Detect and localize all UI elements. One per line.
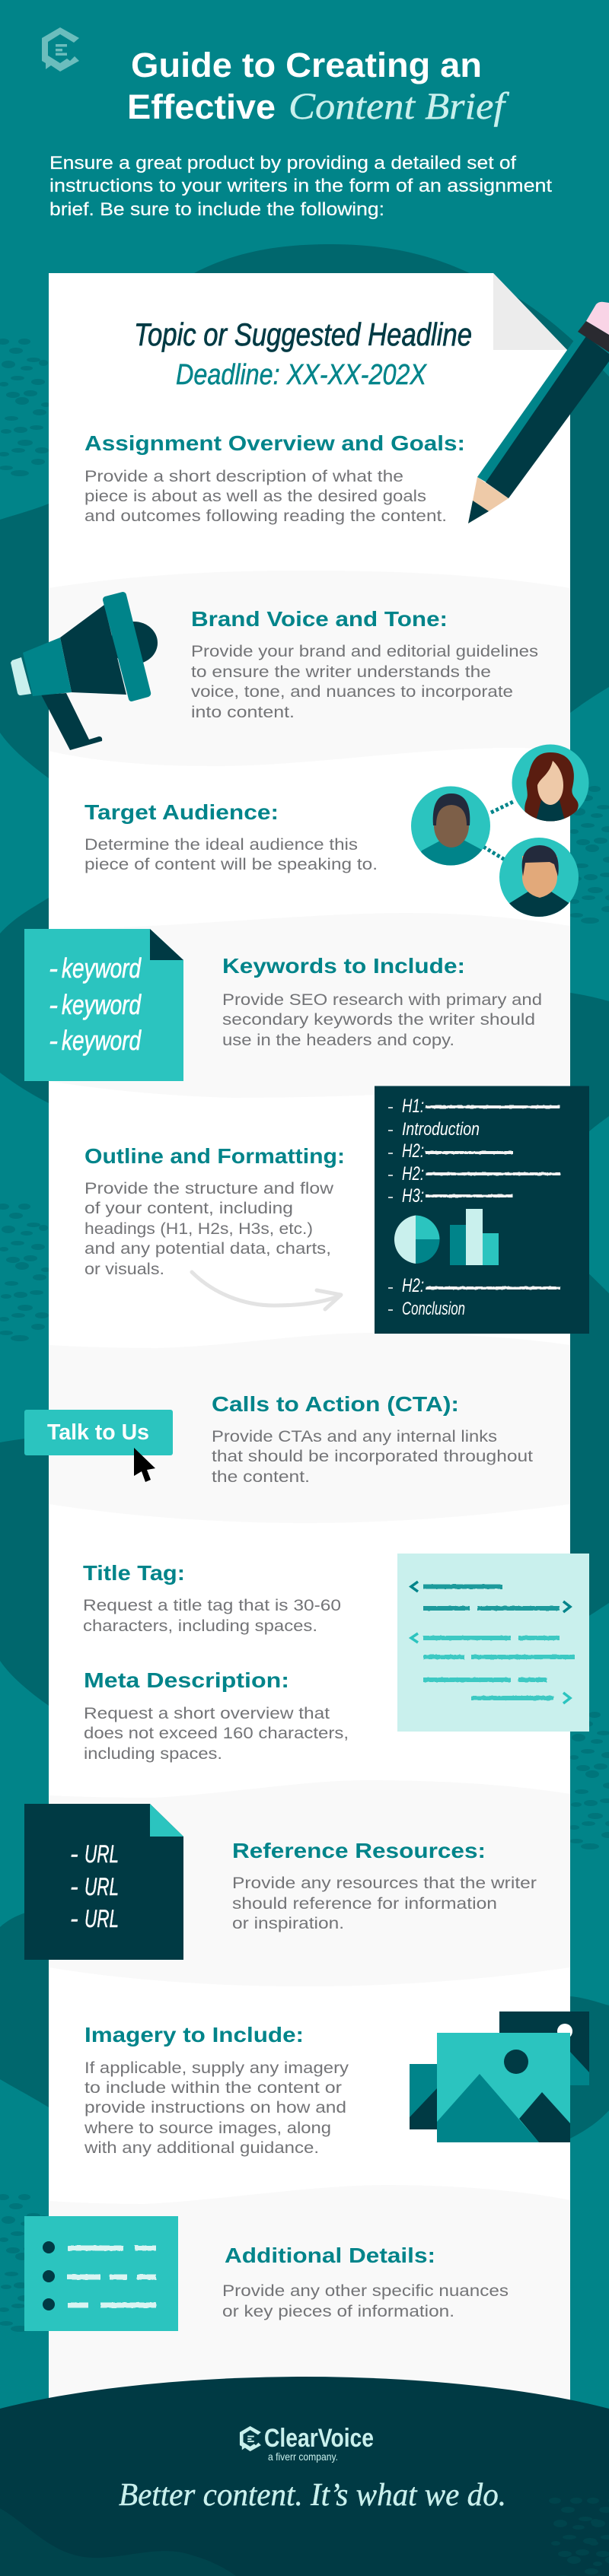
panel: title and meta snippet xyxy=(397,1554,589,1732)
icon: CTA button: Talk to Us xyxy=(47,1420,149,1445)
icon: URL note: URL xyxy=(84,1905,119,1932)
section: calls to action: that should be incorporated throughout xyxy=(212,1448,533,1465)
section: calls to action xyxy=(212,1392,533,1486)
icon: URL note xyxy=(24,1804,183,1960)
section: brand voice: into content. xyxy=(191,704,295,721)
footer logo: ClearVoice xyxy=(264,2424,374,2453)
section: target audience: piece of content will be speaking to. xyxy=(84,856,378,873)
section: calls to action: Calls to Action (CTA): xyxy=(212,1392,459,1416)
intro text xyxy=(49,153,552,220)
section: assignment overview: Provide a short description of what the xyxy=(84,468,403,485)
section: reference resources: Reference Resources: xyxy=(232,1839,486,1862)
section: brand voice: Provide your brand and editorial guidelines xyxy=(191,643,538,660)
topic heading: Topic or Suggested Headline xyxy=(134,316,472,352)
icon: image stack xyxy=(410,2012,589,2142)
section: additional details: Provide any other specific nuances xyxy=(222,2282,509,2300)
panel: outline document: Introduction xyxy=(402,1119,480,1140)
icon: keyword note: keyword xyxy=(62,1025,142,1056)
section: title tag: characters, including spaces. xyxy=(83,1617,317,1635)
section: keywords: use in the headers and copy. xyxy=(222,1032,454,1049)
section: meta description: Request a short overview that xyxy=(84,1705,330,1722)
icon: CTA button xyxy=(24,1410,173,1482)
intro text: Ensure a great product by providing a detailed set of xyxy=(49,153,516,173)
panel: white brief document xyxy=(49,273,570,2434)
section: meta description: including spaces. xyxy=(84,1745,222,1763)
icon: keyword note: keyword xyxy=(62,952,142,984)
icon: keyword note: - xyxy=(49,952,58,984)
section: meta description: does not exceed 160 characters, xyxy=(84,1725,349,1742)
section: brand voice xyxy=(191,607,538,721)
icon: bullet list xyxy=(24,2216,178,2331)
intro text: brief. Be sure to include the following: xyxy=(49,199,384,220)
icon: pencil xyxy=(468,302,609,523)
bar chart xyxy=(450,1209,499,1265)
icon: URL note: - xyxy=(70,1905,78,1932)
deadline: Deadline: XX-XX-202X xyxy=(176,359,427,391)
icon: URL note: - xyxy=(70,1840,78,1868)
section: imagery: Imagery to Include: xyxy=(84,2023,304,2046)
section: imagery: If applicable, supply any imagery xyxy=(84,2059,349,2077)
section: brand voice: to ensure the writer understands the xyxy=(191,663,491,681)
section: additional details xyxy=(222,2244,509,2320)
title xyxy=(127,46,509,127)
section: calls to action: the content. xyxy=(212,1468,310,1486)
panel: outline document: H2: xyxy=(402,1163,424,1185)
footer logo: a fiverr company. xyxy=(268,2450,338,2463)
icon: keyword note: - xyxy=(49,1025,58,1056)
intro text: instructions to your writers in the form of an assignment xyxy=(49,176,552,196)
section: outline and formatting: and any potential data, charts, xyxy=(84,1240,331,1258)
panel: outline document: H3: xyxy=(402,1185,424,1207)
section: target audience: Target Audience: xyxy=(84,800,279,824)
tagline: Better content. It’s what we do. xyxy=(119,2478,506,2513)
title: Guide to Creating an xyxy=(131,46,482,84)
section: keywords xyxy=(222,954,542,1049)
icon: keyword note: - xyxy=(49,989,58,1020)
section: brand voice: Brand Voice and Tone: xyxy=(191,607,448,631)
section: keywords: Keywords to Include: xyxy=(222,954,465,978)
section: outline and formatting: or visuals. xyxy=(84,1261,164,1278)
icon: megaphone xyxy=(11,592,158,750)
section: assignment overview: piece is about as well as the desired goals xyxy=(84,488,426,505)
section: calls to action: Provide CTAs and any internal links xyxy=(212,1428,497,1445)
section: title tag: Request a title tag that is 30-60 xyxy=(83,1597,341,1614)
section: outline and formatting xyxy=(84,1144,345,1278)
section: keywords: secondary keywords the writer should xyxy=(222,1011,535,1029)
section: reference resources: Provide any resources that the writer xyxy=(232,1875,537,1892)
footer xyxy=(0,2377,609,2576)
icon: keyword note xyxy=(24,929,183,1081)
icon: audience avatars xyxy=(411,744,589,921)
section: assignment overview xyxy=(84,431,465,525)
section: imagery xyxy=(84,2023,349,2157)
section: target audience: Determine the ideal audience this xyxy=(84,836,358,854)
title: Content Brief xyxy=(289,84,509,127)
section: title tag: Title Tag: xyxy=(83,1561,185,1585)
section: imagery: provide instructions on how and xyxy=(84,2099,346,2116)
icon: URL note: URL xyxy=(84,1873,119,1900)
section: reference resources xyxy=(232,1839,537,1932)
section: meta description: Meta Description: xyxy=(84,1668,289,1692)
section: reference resources: should reference for information xyxy=(232,1895,497,1913)
section: additional details: or key pieces of information. xyxy=(222,2303,454,2320)
section: outline and formatting: headings (H1, H2s, H3s, etc.) xyxy=(84,1220,313,1238)
pie chart xyxy=(394,1216,440,1264)
logo: ClearVoice mark xyxy=(42,27,79,72)
panel: outline document: Conclusion xyxy=(402,1299,465,1319)
section: meta description xyxy=(84,1668,349,1763)
section: imagery: where to source images, along xyxy=(84,2120,331,2137)
arrow xyxy=(192,1272,341,1309)
panel: outline document: H2: xyxy=(402,1140,424,1162)
section: assignment overview: and outcomes following reading the content. xyxy=(84,507,447,525)
section: imagery: with any additional guidance. xyxy=(84,2139,319,2157)
icon: URL note: URL xyxy=(84,1840,119,1868)
icon: URL note: - xyxy=(70,1873,78,1900)
section: keywords: Provide SEO research with primary and xyxy=(222,991,542,1009)
section: assignment overview: Assignment Overview and Goals: xyxy=(84,431,465,455)
section: title tag xyxy=(83,1561,341,1635)
section: outline and formatting: Outline and Formatting: xyxy=(84,1144,345,1168)
panel: outline document: H2: xyxy=(402,1275,424,1296)
section: outline and formatting: of your content, including xyxy=(84,1200,293,1217)
page fold xyxy=(493,273,567,350)
title: Effective xyxy=(127,87,276,126)
section: brand voice: voice, tone, and nuances to incorporate xyxy=(191,683,513,701)
panel: outline document xyxy=(375,1086,589,1334)
section: outline and formatting: Provide the structure and flow xyxy=(84,1180,334,1197)
footer logo xyxy=(240,2424,374,2463)
panel: outline document: H1: xyxy=(402,1096,424,1117)
section: target audience xyxy=(84,800,378,873)
section: reference resources: or inspiration. xyxy=(232,1915,344,1932)
section: imagery: to include within the content or xyxy=(84,2079,342,2097)
icon: keyword note: keyword xyxy=(62,989,142,1020)
section: additional details: Additional Details: xyxy=(225,2244,435,2267)
